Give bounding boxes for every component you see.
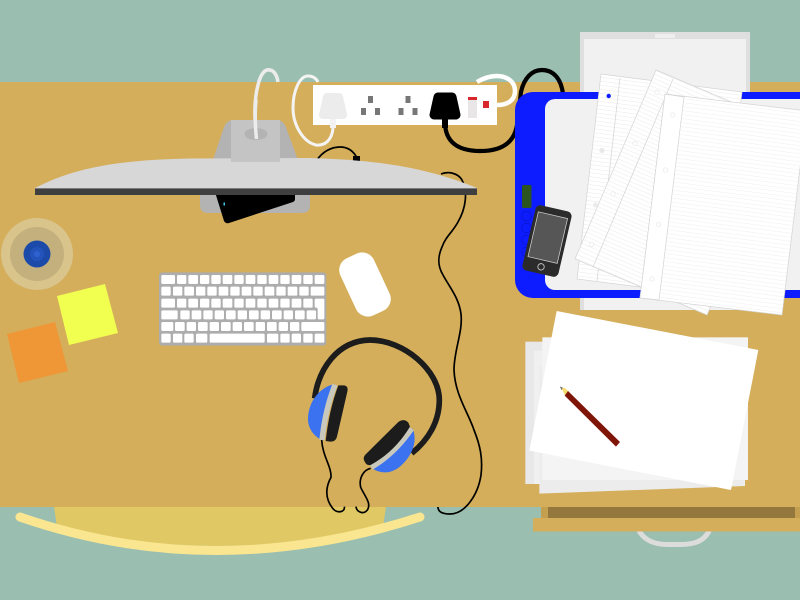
paper stack bbox=[525, 311, 758, 494]
black device under monitor bbox=[215, 192, 295, 223]
power cable white loop bbox=[293, 76, 333, 145]
stand block front over monitor bbox=[231, 150, 280, 162]
top sheet bbox=[529, 311, 758, 490]
small black cable with plug bbox=[317, 147, 360, 162]
tablet bbox=[515, 92, 800, 298]
stand cable hole bbox=[244, 128, 268, 140]
white cable from monitor bbox=[255, 70, 278, 139]
right wire bbox=[356, 468, 371, 513]
laptop lid behind tablet bbox=[580, 32, 750, 310]
power strip bbox=[313, 85, 497, 128]
chair seat bbox=[53, 500, 387, 546]
power cable black to tablet bbox=[445, 70, 563, 151]
monitor foot bbox=[200, 190, 310, 213]
orange sticky note bbox=[7, 322, 68, 383]
long thin cable bbox=[438, 173, 482, 514]
right ear cup bbox=[364, 420, 415, 472]
back sheet inner bbox=[534, 351, 707, 484]
keyboard bbox=[159, 272, 326, 346]
switch bbox=[468, 97, 477, 118]
pencil bbox=[560, 386, 620, 447]
lined sheet three bbox=[640, 94, 800, 315]
back sheet bbox=[525, 342, 712, 484]
monitor body bbox=[35, 158, 477, 195]
lined sheet one bbox=[577, 74, 742, 297]
lined sheet two bbox=[575, 70, 788, 315]
left wire bbox=[322, 440, 344, 512]
power cable white from strip bbox=[477, 76, 515, 105]
white cable in hole bbox=[255, 100, 256, 139]
red indicator bbox=[483, 101, 489, 108]
drawer bbox=[533, 507, 800, 532]
white plug bbox=[323, 97, 343, 128]
tablet green button bbox=[522, 185, 532, 208]
yellow sticky note bbox=[57, 284, 118, 345]
flat sheet bbox=[542, 337, 748, 480]
chair back rail bbox=[20, 517, 420, 550]
socket one bbox=[361, 96, 380, 115]
drawer handle bbox=[638, 529, 710, 544]
headband bbox=[315, 340, 439, 453]
desk surface bbox=[0, 82, 800, 507]
monitor stand back bbox=[213, 120, 298, 160]
socket two bbox=[398, 96, 418, 115]
headphones bbox=[308, 340, 439, 513]
phone bbox=[521, 204, 573, 278]
tilted sheet bbox=[539, 367, 745, 494]
left ear cup bbox=[308, 384, 348, 442]
mouse bbox=[335, 248, 395, 321]
coaster and cup bbox=[1, 218, 73, 290]
tablet round buttons bbox=[522, 211, 531, 257]
monitor stand block bbox=[231, 120, 280, 162]
black plug bbox=[434, 97, 456, 128]
